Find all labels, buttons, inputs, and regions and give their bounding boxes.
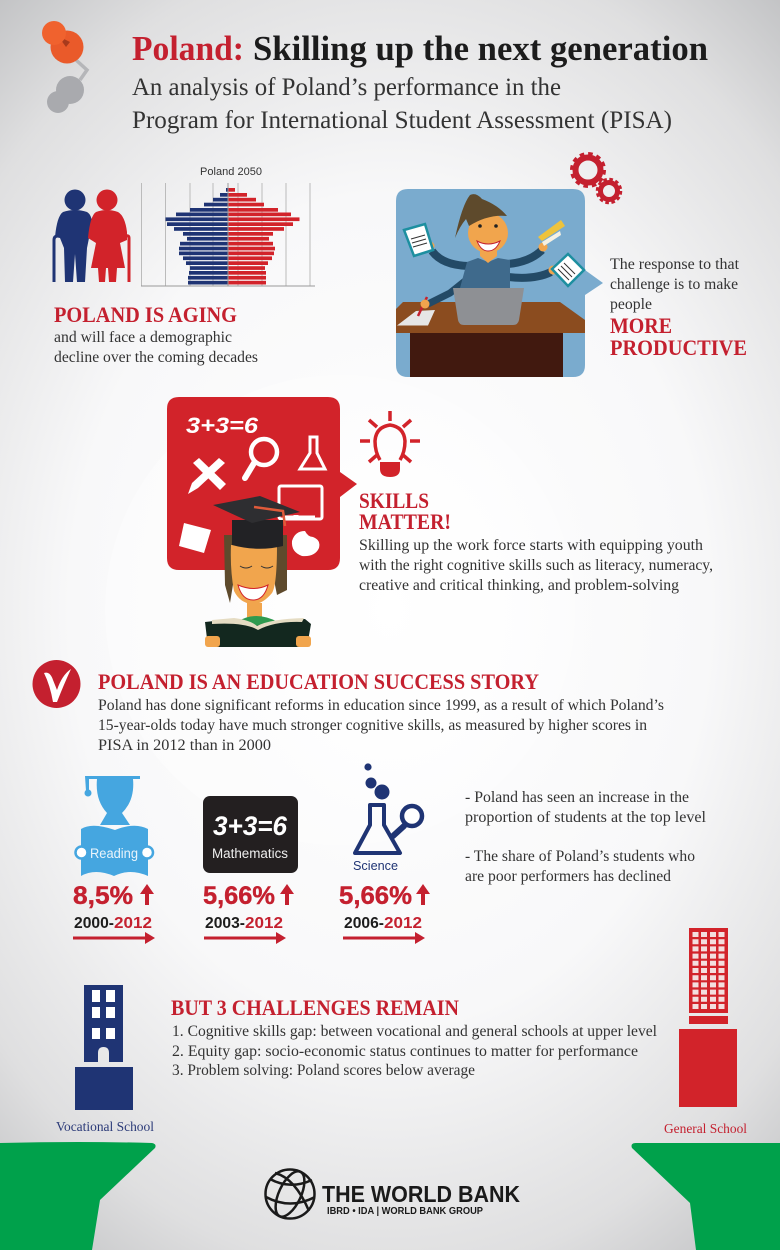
- torso: [460, 258, 510, 288]
- icon: flask: [300, 437, 325, 469]
- text: education success story: POLAND IS AN EDUCATION SUCCESS STORY: [98, 669, 539, 694]
- text: more productive: MORE: [610, 313, 672, 338]
- stat: mathematics: 5,66%: [203, 882, 275, 910]
- text: education success story: PISA in 2012 than in 2000: [98, 737, 271, 754]
- text: challenges: [171, 995, 658, 1079]
- text: skills matter: SKILLS: [359, 488, 429, 513]
- desk: [396, 302, 585, 333]
- left green hill: [0, 1142, 156, 1250]
- stat: science: [339, 882, 430, 944]
- icon: ruler and pencil: [188, 458, 226, 494]
- text: more productive: PRODUCTIVE: [610, 335, 747, 360]
- stat: mathematics: 2012: [245, 915, 283, 932]
- icon: magnifier: [245, 439, 277, 478]
- icon: lightbulb: [360, 411, 420, 477]
- laptop: [453, 288, 524, 325]
- subtitle: An analysis of Poland’s performance in the: [132, 74, 561, 101]
- text: education success story: 15-year-olds today have much stronger cognitive skills, as measured by higher scores in: [98, 717, 647, 734]
- icon: mathematics blackboard: [203, 796, 298, 873]
- text: challenges: BUT 3 CHALLENGES REMAIN: [171, 995, 459, 1020]
- icon: reading: [76, 776, 153, 876]
- icon: mathematics blackboard: 3+3=6: [213, 811, 288, 841]
- text: top level and poor performers: [465, 789, 706, 885]
- text: top level and poor performers: - The share of Poland’s students who: [465, 848, 695, 865]
- icon: vocational school building: [75, 985, 133, 1110]
- icon: general school building: [679, 928, 737, 1107]
- graduate: [224, 535, 287, 603]
- text: skills matter: [359, 488, 713, 594]
- label: vocational school: Vocational School: [56, 1119, 154, 1134]
- stat: mathematics: [203, 882, 294, 944]
- icon: science flask: [353, 763, 422, 873]
- stat: reading: [73, 882, 155, 944]
- text: skills matter: Skilling up the work force starts with equipping youth: [359, 537, 703, 554]
- text: more productive: people: [610, 296, 652, 313]
- icon: map pin: [42, 21, 87, 113]
- icon: gears: [572, 154, 620, 202]
- text: skills matter: with the right cognitive skills such as literacy, numeracy,: [359, 557, 713, 574]
- stat: science: 2012: [384, 915, 422, 932]
- text: Poland is aging: and will face a demographic: [54, 329, 232, 346]
- text: skills matter: creative and critical thinking, and problem-solving: [359, 577, 679, 594]
- text: top level and poor performers: - Poland has seen an increase in the: [465, 789, 689, 806]
- icon: monitor: [279, 486, 322, 520]
- icon: palette: [292, 531, 319, 556]
- text: education success story: [98, 669, 664, 754]
- stat: science: 5,66%: [339, 882, 412, 910]
- right green hill: [632, 1143, 780, 1250]
- icon: mathematics blackboard: Mathematics: [212, 846, 288, 861]
- icon: elderly couple: [54, 190, 129, 282]
- stat: science: 2006-: [344, 915, 384, 932]
- note cards: [538, 220, 565, 241]
- clipboard right: [552, 254, 584, 286]
- title: Poland:: [132, 29, 244, 68]
- logo: The World Bank: [266, 1167, 520, 1221]
- text: challenges: 2. Equity gap: socio-economic status continues to matter for performance: [172, 1043, 638, 1060]
- subtitle: [132, 74, 672, 134]
- text: more productive: [610, 256, 747, 360]
- label: general school: General School: [664, 1121, 747, 1136]
- hands: [420, 242, 558, 308]
- icon: reading: Reading: [90, 846, 138, 861]
- text: Poland is aging: decline over the coming decades: [54, 349, 258, 366]
- stat: reading: 2012: [114, 915, 152, 932]
- text: challenges: 1. Cognitive skills gap: between vocational and general schools at upper level: [172, 1023, 658, 1040]
- title: Skilling up the next generation: [253, 29, 708, 68]
- text: Poland is aging: POLAND IS AGING: [54, 302, 237, 327]
- text: challenges: 3. Problem solving: Poland scores below average: [172, 1062, 475, 1079]
- paper and pen: [397, 310, 435, 326]
- logo: The World Bank: THE WORLD BANK: [322, 1181, 520, 1207]
- head and hair: [468, 213, 508, 253]
- text: skills matter: MATTER!: [359, 509, 451, 534]
- clipboard left: [404, 224, 433, 256]
- text: education success story: Poland has done significant reforms in education since 1999, as a result of which Poland’s: [98, 697, 664, 714]
- text: more productive: challenge is to make: [610, 276, 738, 293]
- logo: The World Bank: IBRD • IDA | WORLD BANK GROUP: [327, 1206, 483, 1217]
- chart: population pyramid Poland 2050: [141, 166, 315, 286]
- icon: notepad: [179, 523, 211, 553]
- equation: 3+3=6: [186, 413, 259, 438]
- icon: science flask: Science: [353, 859, 398, 873]
- panel: skills illustration: [167, 397, 357, 647]
- panel: productive worker illustration: [396, 189, 603, 377]
- text: top level and poor performers: are poor performers has declined: [465, 868, 671, 885]
- text: top level and poor performers: proportion of students at the top level: [465, 809, 706, 826]
- subtitle: Program for International Student Assessment (PISA): [132, 107, 672, 134]
- text: more productive: The response to that: [610, 256, 740, 273]
- chart: population pyramid Poland 2050: Poland 2050: [200, 166, 262, 178]
- icon: check badge: [32, 660, 80, 708]
- stat: reading: 8,5%: [73, 882, 133, 910]
- stat: reading: 2000-: [74, 915, 114, 932]
- arms: [428, 277, 470, 304]
- stat: mathematics: 2003-: [205, 915, 245, 932]
- text: Poland is aging: [54, 302, 258, 366]
